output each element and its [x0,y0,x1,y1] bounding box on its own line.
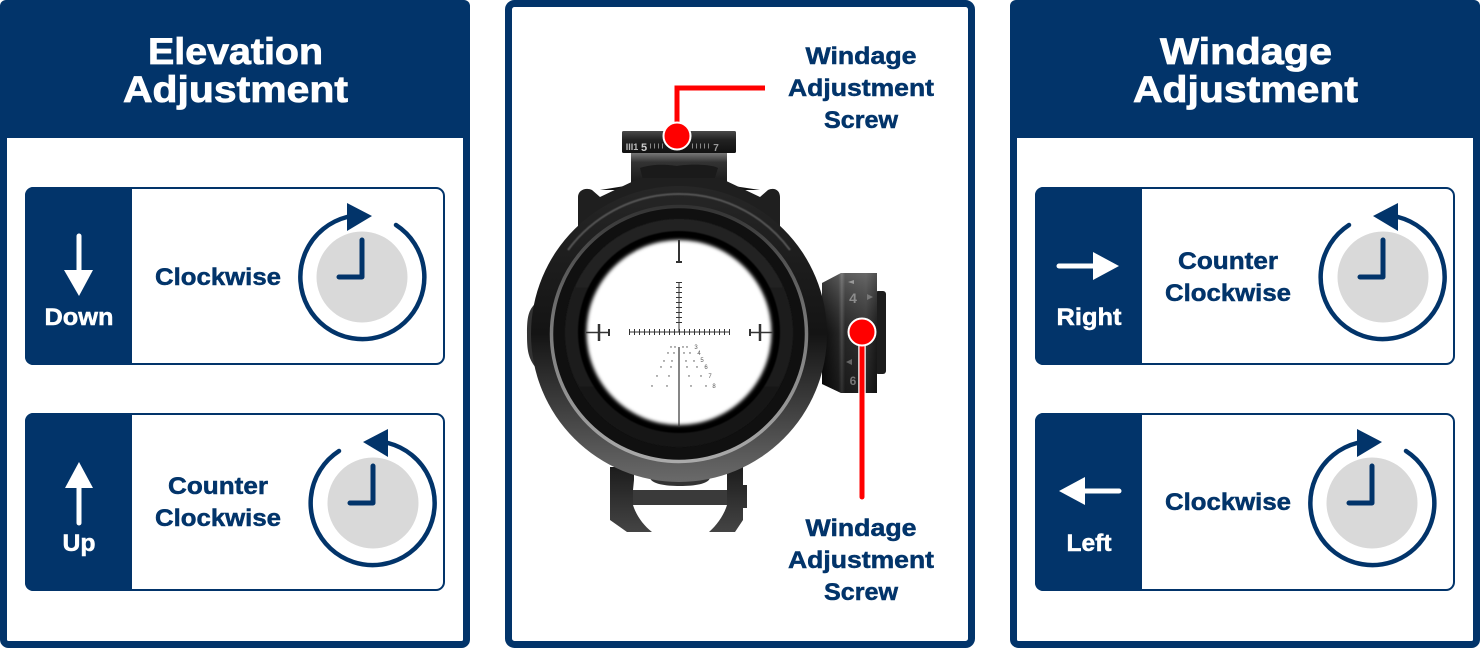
reticle [586,240,773,426]
text: counter clockwise: Clockwise [155,505,281,532]
icon: clockwise dial [1310,429,1434,565]
heading: windage adjustment: Windage [1160,31,1332,72]
callout: top windage screw: Screw [824,107,898,134]
side turret [822,273,886,393]
callout: top windage screw [664,43,934,150]
reticle: 3 [694,345,698,351]
callout: side windage screw: Adjustment [788,547,934,574]
text: clockwise: Clockwise [1165,489,1291,516]
panel: elevation adjustment [0,0,470,644]
card: up counter clockwise [25,413,444,591]
label: left: Left [1066,530,1112,557]
text: clockwise: Clockwise [155,264,281,291]
callout: side windage screw: Windage [806,515,916,542]
reticle: 6 [704,365,708,371]
icon: up arrow [65,462,93,523]
text: counter clockwise: Counter [1178,248,1278,275]
heading: elevation adjustment [0,0,470,138]
side bumps [527,303,710,486]
panel: windage adjustment [1010,0,1480,644]
callout: side windage screw: Screw [824,579,898,606]
icon: right arrow [1059,252,1119,280]
heading: elevation adjustment: Elevation [148,31,323,72]
text: counter clockwise [1165,248,1291,307]
card: right counter clockwise [1035,187,1454,365]
text: counter clockwise: Counter [168,473,268,500]
label: down: Down [44,304,114,331]
icon: counter clockwise dial [1321,203,1445,339]
reticle: 5 [700,358,704,364]
card: down clockwise [25,187,444,365]
scope shoulders [578,178,780,232]
reticle: 7 [708,374,712,380]
illustration: rifle scope [527,131,886,532]
icon: clockwise dial [300,203,424,339]
text: counter clockwise: Clockwise [1165,280,1291,307]
heading: windage adjustment: Adjustment [1133,69,1358,110]
callout: top windage screw: Adjustment [788,75,934,102]
outer body [531,186,827,482]
callout: side windage screw [788,318,934,606]
heading: windage adjustment [1010,0,1480,138]
card: left clockwise [1035,413,1454,591]
top turret: 5 [641,142,647,154]
side turret: 6 [850,374,857,388]
top turret: 7 [713,143,719,154]
top turret [600,131,760,190]
label: up: Up [62,530,96,557]
label: right: Right [1056,304,1122,331]
heading: elevation adjustment: Adjustment [123,69,348,110]
icon: counter clockwise dial [311,429,435,565]
reticle: 4 [697,351,701,357]
top turret: III1 [626,142,638,152]
callout: top windage screw: Windage [806,43,916,70]
icon: left arrow [1059,477,1119,505]
icon: down arrow [64,236,93,296]
text: counter clockwise [155,473,281,532]
side turret: 4 [849,290,857,306]
reticle: 8 [712,384,716,390]
mount [610,467,747,532]
panel: scope [508,4,972,644]
